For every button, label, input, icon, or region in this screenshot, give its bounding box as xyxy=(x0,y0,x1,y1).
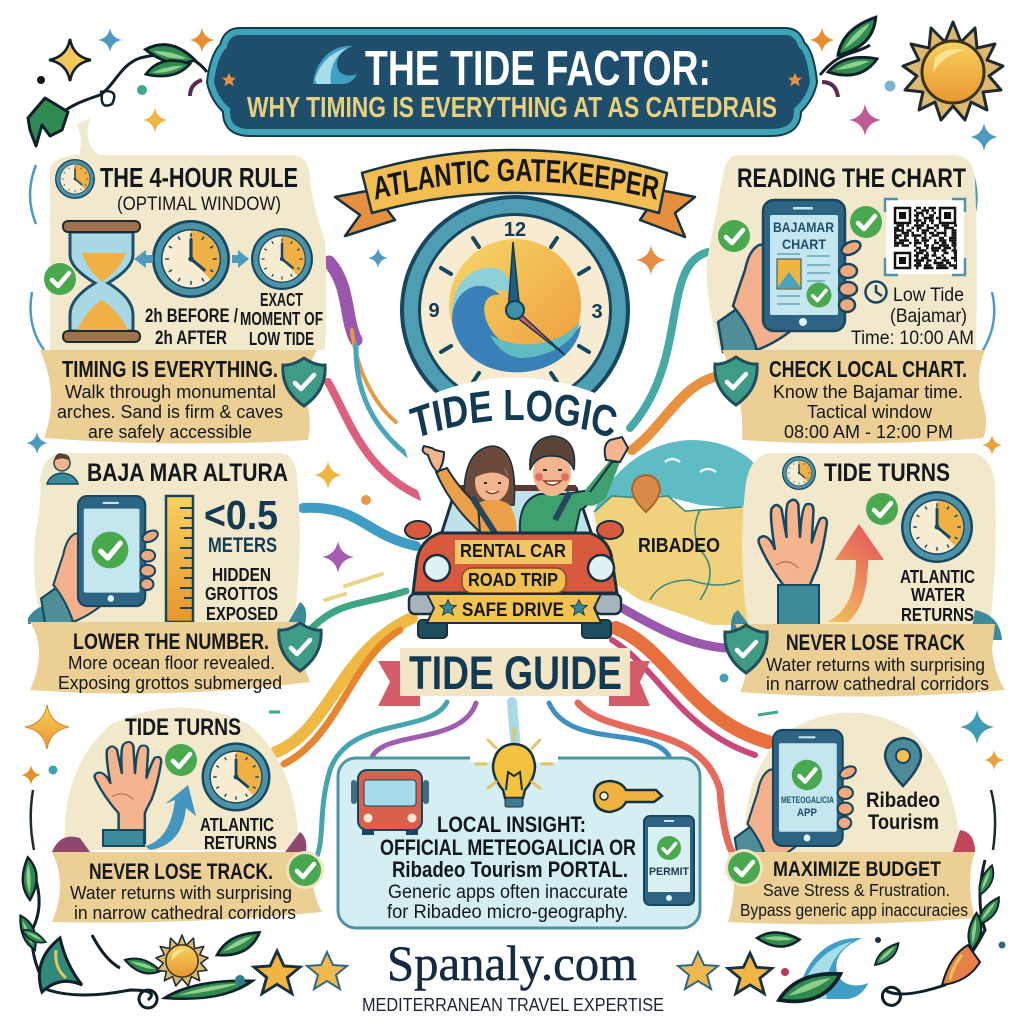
clock numbers: 12 xyxy=(504,219,526,241)
shield xyxy=(725,625,767,673)
clock numbers: 3 xyxy=(591,301,603,323)
label line 3: RETURNS xyxy=(901,605,974,625)
label line 2: RETURNS xyxy=(204,833,277,853)
icon: clock xyxy=(901,491,973,563)
banner: safe drive xyxy=(427,594,601,623)
panel: tide turns left xyxy=(52,708,324,923)
icon: small clock xyxy=(55,159,95,199)
icon: clock 2h window xyxy=(152,220,230,298)
check badge xyxy=(792,760,822,790)
check badge xyxy=(92,532,128,568)
title text: THE TIDE FACTOR: xyxy=(365,42,711,96)
label: tourism: Tourism xyxy=(868,811,939,834)
shield xyxy=(715,357,757,405)
title banner xyxy=(211,32,813,132)
windshield xyxy=(441,488,592,535)
panel: local insight xyxy=(338,728,700,928)
icon: star xyxy=(678,952,718,989)
white halo xyxy=(402,378,622,560)
label line 1: ATLANTIC xyxy=(900,567,975,587)
icon: banner star right xyxy=(788,73,802,86)
ribbon text: ATLANTIC GATEKEEPER xyxy=(375,158,658,200)
label line 3: EXPOSED xyxy=(206,604,278,624)
ribbon heading: MAXIMIZE BUDGET xyxy=(773,858,941,881)
ribbon: maximize budget xyxy=(728,852,975,924)
decoration: sparkles and side arcs xyxy=(21,165,1004,850)
label line 2: WATER xyxy=(911,585,965,605)
icon: light bulb xyxy=(476,728,552,807)
icon: hand with phone xyxy=(41,496,160,624)
woman traveller xyxy=(423,446,516,533)
ribbon line 1: Walk through monumental xyxy=(65,381,276,402)
clock hands xyxy=(506,242,565,355)
map: Ribadeo xyxy=(594,440,760,625)
panel: baja mar altura xyxy=(28,453,321,694)
icon: map pin xyxy=(885,738,921,786)
icon: hourglass xyxy=(63,221,140,342)
icon: hand with phone xyxy=(718,200,863,352)
label: time: Time: 10:00 AM xyxy=(851,328,974,349)
value: <0.5 xyxy=(204,492,278,538)
footer brand: Spanaly.com xyxy=(387,935,637,991)
tide guide text: TIDE GUIDE xyxy=(409,646,622,699)
icon: banner star left xyxy=(222,73,236,86)
subheading: (OPTIMAL WINDOW) xyxy=(117,194,281,215)
label: low tide: LOW TIDE xyxy=(249,329,314,349)
ribbon heading: LOWER THE NUMBER. xyxy=(73,629,269,654)
roof bar xyxy=(456,485,576,491)
label line 1: HIDDEN xyxy=(212,565,271,585)
bumpers xyxy=(409,594,621,614)
plate: rental car xyxy=(455,540,572,564)
footer brand xyxy=(362,935,664,1015)
ribbon line 2: in narrow cathedral corridors xyxy=(766,674,989,694)
panel: maximize budget xyxy=(725,712,975,924)
ribbon line 1: More ocean floor revealed. xyxy=(68,653,275,673)
label: ribadeo: Ribadeo xyxy=(866,789,940,812)
icon: star xyxy=(254,951,300,994)
wave and sun xyxy=(449,239,581,372)
icon: permit phone xyxy=(644,816,694,905)
insight line 1: OFFICIAL METEOGALICIA OR xyxy=(380,835,636,860)
map label: RIBADEO xyxy=(638,535,720,557)
ribbon heading: NEVER LOSE TRACK. xyxy=(89,859,273,884)
check badge xyxy=(165,744,197,776)
ribbon: never lose track xyxy=(52,852,322,923)
icon: clock low tide xyxy=(251,228,313,290)
label: exact: EXACT xyxy=(260,290,303,310)
subtitle text: WHY TIMING IS EVERYTHING AT AS CATEDRAIS xyxy=(247,92,777,124)
ribbon line 2: arches. Sand is firm & caves xyxy=(57,401,283,422)
label line 2: GROTTOS xyxy=(205,584,278,604)
icon: star xyxy=(728,953,772,994)
insight line 2: Ribadeo Tourism PORTAL. xyxy=(392,857,628,882)
banner: tide guide xyxy=(378,646,650,706)
insight heading: LOCAL INSIGHT: xyxy=(437,812,586,837)
arrow xyxy=(145,785,196,850)
panel: reading the chart xyxy=(707,155,986,444)
rental car text: RENTAL CAR xyxy=(460,541,566,561)
label: low tide: Low Tide xyxy=(893,285,964,306)
arrows between clocks xyxy=(134,250,249,268)
plate: road trip xyxy=(462,568,566,593)
ribbon: never lose track xyxy=(735,624,1005,697)
ribbon line 1: Save Stress & Frustration. xyxy=(763,880,950,900)
heading: READING THE CHART xyxy=(737,163,966,193)
phone screen text: BAJAMAR xyxy=(773,219,834,235)
car body xyxy=(413,533,617,593)
icon: hand with phone xyxy=(735,730,858,865)
clock numbers xyxy=(428,219,603,323)
insight line 3: Generic apps often inaccurate xyxy=(388,882,628,903)
label: moment of: MOMENT OF xyxy=(240,309,323,329)
icon: star xyxy=(307,952,347,989)
decoration: top-right vine, sun and sparkles xyxy=(810,15,1003,151)
check badge xyxy=(725,849,763,887)
icon: raised hand xyxy=(95,742,161,844)
ribbon heading: CHECK LOCAL CHART. xyxy=(769,356,967,382)
ribbon line 1: Know the Bajamar time. xyxy=(773,381,963,402)
decoration: top-left vine and sparkles xyxy=(28,28,214,146)
ribbon line 2: in narrow cathedral corridors xyxy=(74,903,296,923)
panel: the 4-hour rule xyxy=(40,118,326,444)
ribbon line 3: 08:00 AM - 12:00 PM xyxy=(784,421,953,442)
banner stars xyxy=(440,600,587,615)
icon: wave xyxy=(798,938,868,999)
icon: ruler xyxy=(166,496,193,622)
arrow xyxy=(826,524,884,622)
check badge xyxy=(44,263,76,295)
icon: raised hand xyxy=(759,500,827,621)
insight line 4: for Ribadeo micro-geography. xyxy=(387,902,628,923)
heading: THE 4-HOUR RULE xyxy=(100,162,298,193)
heading: tide logic: TIDE LOGIC xyxy=(408,390,617,436)
icon: bus xyxy=(351,770,429,835)
icon: permit phone: PERMIT xyxy=(649,866,689,878)
clock numbers: 9 xyxy=(428,300,440,322)
label: 2h after: 2h AFTER xyxy=(155,328,227,349)
icon: sun xyxy=(903,22,1003,120)
decoration: bottom-right floral xyxy=(678,860,1006,1005)
ribbon: lower the number xyxy=(30,622,310,694)
connector streams xyxy=(276,252,768,858)
safe drive text: SAFE DRIVE xyxy=(462,600,564,621)
icon: key xyxy=(594,781,662,812)
label line 1: ATLANTIC xyxy=(200,815,274,835)
central clock xyxy=(400,195,630,425)
icon: clock xyxy=(202,742,270,812)
app label: METEOGALICIA xyxy=(781,795,834,805)
ribbon: atlantic gatekeeper xyxy=(334,148,696,238)
heading: TIDE TURNS xyxy=(125,714,241,741)
icon: low tide clock xyxy=(866,282,886,302)
check badge xyxy=(866,493,898,525)
headlights xyxy=(424,555,614,581)
icon: title wave xyxy=(313,46,357,84)
decoration: bottom-left floral xyxy=(19,857,347,1008)
check badge xyxy=(286,851,324,889)
mini chart xyxy=(777,254,830,304)
wheels xyxy=(418,620,611,638)
icon: person xyxy=(47,453,78,484)
sleeve xyxy=(103,830,144,846)
footer tagline: MEDITERRANEAN TRAVEL EXPERTISE xyxy=(362,995,664,1015)
ribbon: check local chart xyxy=(722,350,986,444)
QR code xyxy=(885,199,965,275)
shield xyxy=(279,623,321,671)
panel: tide turns right xyxy=(725,453,1005,697)
label: 2h before: 2h BEFORE / xyxy=(145,306,239,327)
ribbon heading: NEVER LOSE TRACK xyxy=(786,630,965,655)
check badges xyxy=(718,206,882,307)
phone screen text 2: CHART xyxy=(782,236,826,252)
ribbon line 2: Tactical window xyxy=(807,401,933,422)
road trip text: ROAD TRIP xyxy=(468,570,558,590)
sleeve xyxy=(778,585,819,625)
icon: map pin xyxy=(632,475,660,512)
ribbon line 2: Exposing grottos submerged xyxy=(58,673,282,693)
heading: tide logic xyxy=(408,390,617,436)
man traveller xyxy=(520,436,628,533)
icon: small clock xyxy=(782,456,816,490)
swirl leaf xyxy=(39,938,82,992)
ribbon line 3: are safely accessible xyxy=(88,421,252,442)
ribbon line 1: Water returns with surprising xyxy=(766,655,985,675)
heading: TIDE TURNS xyxy=(824,459,950,487)
heading: BAJA MAR ALTURA xyxy=(87,459,288,487)
shield xyxy=(283,358,325,406)
car with travellers xyxy=(405,436,628,638)
unit: METERS xyxy=(208,534,277,557)
ribbon: timing is everything xyxy=(40,350,317,444)
ribbon line 1: Water returns with surprising xyxy=(70,883,292,903)
ribbon line 2: Bypass generic app inaccuracies xyxy=(740,900,968,920)
icon: small sun xyxy=(156,935,208,986)
ribbon heading: TIMING IS EVERYTHING. xyxy=(62,356,278,382)
colored plume xyxy=(942,945,980,985)
label: bajamar: (Bajamar) xyxy=(890,306,967,327)
app label 2: APP xyxy=(797,807,817,819)
wing mirrors xyxy=(405,521,623,539)
